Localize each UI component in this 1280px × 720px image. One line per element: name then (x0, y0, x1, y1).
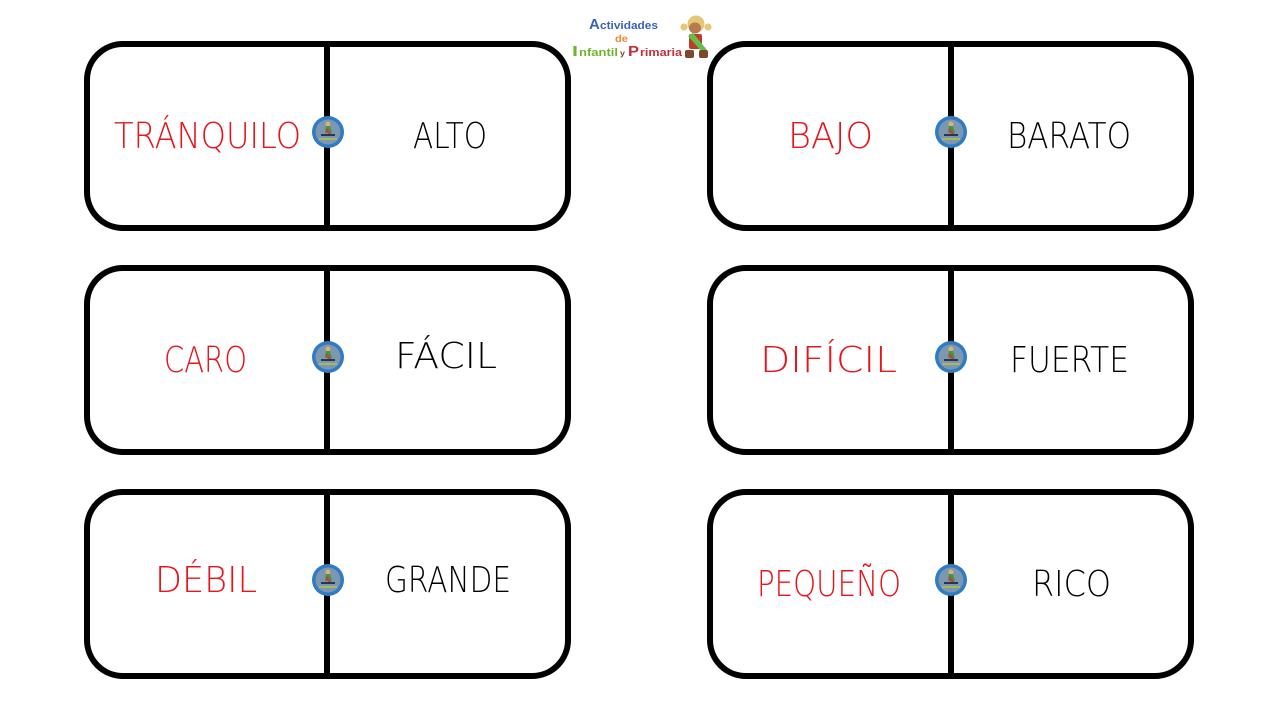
logo: Actividades de Infantil y Primaria: I (572, 43, 578, 60)
domino card: BAJO / BARATO: BARATO (1007, 116, 1131, 157)
domino card: DÉBIL / GRANDE (87, 492, 568, 676)
domino card: DIFÍCIL / FUERTE: FUERTE (1010, 340, 1129, 381)
domino card: BAJO / BARATO: BAJO (788, 116, 873, 157)
domino card: CARO / FÁCIL (87, 268, 568, 452)
domino card: CARO / FÁCIL: CARO (164, 340, 247, 381)
logo: Actividades de Infantil y Primaria: de (615, 34, 628, 45)
domino card: TRÁNQUILO / ALTO (87, 44, 568, 228)
logo: Actividades de Infantil y Primaria: ctividades (600, 20, 658, 32)
domino card: PEQUEÑO / RICO: RICO (1032, 564, 1111, 605)
domino card: PEQUEÑO / RICO: PEQUEÑO (757, 563, 901, 605)
icon: child with pencil (680, 16, 712, 58)
logo: Actividades de Infantil y Primaria: A (589, 16, 600, 33)
domino card: DIFÍCIL / FUERTE (710, 268, 1191, 452)
domino card: DÉBIL / GRANDE: GRANDE (385, 560, 511, 601)
domino card: DÉBIL / GRANDE: DÉBIL (155, 559, 257, 601)
domino card: TRÁNQUILO / ALTO: TRÁNQUILO (114, 115, 301, 157)
domino card: DIFÍCIL / FUERTE: DIFÍCIL (760, 339, 897, 381)
logo: Actividades de Infantil y Primaria: rimaria (640, 47, 683, 59)
domino card: BAJO / BARATO (710, 44, 1191, 228)
domino card: TRÁNQUILO / ALTO: ALTO (413, 116, 487, 157)
logo: Actividades de Infantil y Primaria: P (628, 43, 639, 60)
domino card: PEQUEÑO / RICO (710, 492, 1191, 676)
logo: Actividades de Infantil y Primaria: nfantil (579, 47, 618, 59)
domino card: CARO / FÁCIL: FÁCIL (395, 335, 497, 377)
logo: Actividades de Infantil y Primaria: y (620, 49, 626, 58)
logo: Actividades de Infantil y Primaria (572, 16, 712, 60)
